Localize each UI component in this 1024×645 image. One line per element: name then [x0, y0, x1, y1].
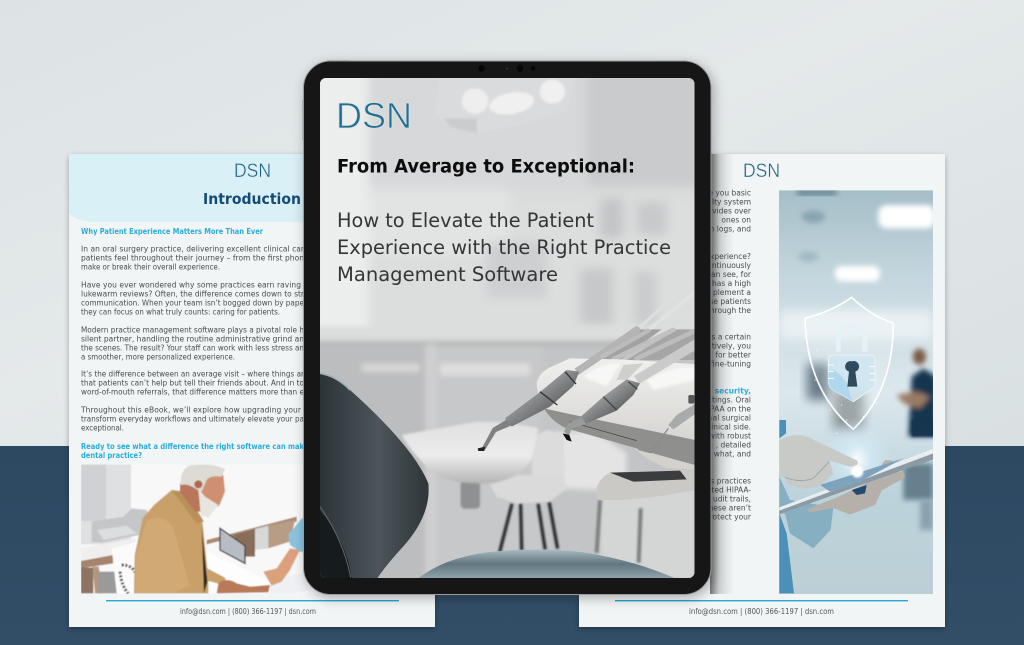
faded upper photo	[313, 68, 700, 335]
handpiece left tip	[478, 419, 513, 451]
hose A over head	[577, 356, 600, 372]
dental instrument unit	[505, 309, 694, 500]
screen: dental office cover	[310, 68, 700, 583]
text block: right page body: ttings. Oral	[709, 396, 751, 405]
logo: cover DSN: DSN	[336, 95, 412, 136]
text block: right page body	[707, 189, 752, 522]
text block: left page body: Ready to see what a difference the right software can mak	[81, 442, 305, 451]
text block: right page body: ones on	[721, 216, 751, 225]
text block: left page body: dental practice?	[81, 451, 142, 460]
cover subtitle: How to Elevate the Patient	[337, 209, 594, 232]
man shirt	[134, 490, 227, 593]
man hands and paper	[217, 580, 270, 593]
text block: right page body: xperience?	[710, 252, 751, 261]
seat	[418, 549, 675, 578]
text block: right page body: hrough the	[710, 306, 751, 315]
text block: right page body: ovides over	[707, 207, 752, 216]
text block: right page body: has a high	[712, 279, 751, 288]
text block: right page body: n logs, and	[710, 225, 751, 234]
hose gaps	[603, 329, 662, 360]
text block: left page body: communication. When your team isn’t bogged down by pape	[81, 299, 304, 308]
blurred figure behind	[903, 463, 933, 500]
dental chair back	[317, 373, 429, 578]
tablet shadow on right page	[710, 154, 734, 594]
text block: left page body: transform everyday workflows and ultimately elevate your pa	[81, 415, 304, 424]
handpiece B	[563, 379, 640, 442]
text block: right page body: vs a certain	[707, 333, 751, 342]
desk left	[82, 539, 134, 560]
text block: left page body: that patients can’t help but tell their friends about. And in to	[81, 379, 304, 388]
text block: right page body: ted HIPAA-	[711, 486, 751, 495]
text block: right page body: rotect your	[710, 513, 752, 522]
text block: right page body: tively, you	[712, 342, 751, 351]
sleeve	[779, 420, 786, 438]
logo: right page DSN: DSN	[743, 161, 780, 182]
footer rule left	[106, 600, 399, 601]
text block: right page body: s practices	[710, 477, 751, 486]
unit underside	[544, 408, 695, 468]
text block: left page body: exceptional.	[81, 424, 124, 433]
text block: right page body: fine-tuning	[710, 360, 751, 369]
sofa	[92, 508, 147, 542]
panel: right ebook page	[579, 154, 945, 627]
front desk	[112, 543, 135, 594]
text block: right page body: hese aren’t	[709, 504, 751, 513]
back counter	[207, 517, 297, 544]
text block: left page body: lukewarm reviews? Often, the difference comes down to str	[81, 290, 305, 299]
footer text right: info@dsn.com | (800) 366-1197 | dsn.com	[689, 607, 834, 616]
text block: right page body: e you basic	[708, 189, 751, 198]
held tablet	[779, 448, 933, 514]
device: tablet	[302, 60, 711, 594]
text block: left page body: In an oral surgery practice, delivering excellent clinical car	[81, 245, 305, 254]
hose B over head	[637, 342, 700, 380]
text block: left page body: the scenes. The result? Your staff can work with less stress an	[81, 344, 304, 353]
text block: left page body: patients feel throughout their journey – from the first phon	[81, 254, 304, 263]
dental lamp	[446, 78, 566, 132]
text block: right page body: an see, for	[711, 270, 752, 279]
handpiece C	[638, 395, 695, 453]
cover subtitle	[337, 209, 671, 286]
text block: left page body: Have you ever wondered why some practices earn raving	[81, 281, 301, 290]
text block: right page body: inical side.	[711, 423, 751, 432]
photo: security shield and tablet	[779, 190, 937, 595]
shield	[805, 297, 893, 429]
footer text left: info@dsn.com | (800) 366-1197 | dsn.com	[180, 607, 316, 616]
text block: right page body: with robust	[709, 432, 751, 441]
sink basin	[533, 430, 627, 490]
tool holder	[597, 469, 695, 500]
text block: right page body: nal surgical	[708, 414, 751, 423]
text block: right page body: se patients	[709, 297, 751, 306]
text block: right page body: ontinuously	[707, 261, 752, 270]
side buttons	[302, 100, 304, 140]
cover subtitle: Management Software	[337, 263, 558, 286]
text block: right page body: udit trails,	[713, 495, 751, 504]
text block: right page body: , detailed	[716, 441, 751, 450]
panel: left ebook page	[69, 154, 435, 627]
header band	[69, 154, 435, 222]
text block: left page body: Why Patient Experience Matters More Than Ever	[81, 227, 263, 236]
text block: left page body: Modern practice management software plays a pivotal role h	[81, 326, 304, 335]
heading: Introduction: Introduction	[203, 190, 301, 208]
hands, sleeve and held tablet	[779, 417, 935, 593]
text block: right page body: d security,	[707, 387, 751, 396]
background person	[897, 349, 937, 437]
text block: left page body: they can focus on what truly counts: caring for patients.	[81, 308, 280, 317]
footer rule right	[615, 600, 908, 601]
text block: right page body: IPAA on the	[708, 405, 751, 414]
monitor	[220, 528, 245, 563]
cover title: From Average to Exceptional:	[337, 156, 635, 178]
text block: left page body: word-of-mouth referrals, that difference matters more than e	[81, 388, 304, 397]
lower hand	[807, 460, 905, 515]
text block: left page body	[80, 227, 305, 460]
camera dots	[478, 65, 535, 72]
padlock	[828, 342, 876, 402]
cover subtitle: Experience with the Right Practice	[337, 236, 671, 259]
text block: right page body: plement a	[713, 288, 751, 297]
text block: left page body: Throughout this eBook, we’ll explore how upgrading your	[80, 406, 302, 415]
text block: right page body: alty system	[707, 198, 751, 207]
text block: left page body: make or break their overall experience.	[81, 263, 220, 272]
receptionist arm	[263, 548, 300, 586]
photo: patient at front desk	[81, 464, 303, 594]
sink column and legs	[461, 480, 480, 509]
text block: left page body: silent partner, handling the routine administrative grind an	[81, 335, 304, 344]
logo: left page DSN: DSN	[234, 161, 271, 182]
lower photo: cabinets	[310, 327, 700, 583]
tablet body	[304, 61, 711, 594]
text block: left page body: a smoother, more personalized experience.	[81, 353, 235, 362]
sparkles	[814, 349, 891, 441]
hoses	[590, 309, 694, 360]
handpiece A	[505, 370, 579, 427]
man neck, head, hair, beard	[179, 483, 201, 512]
text block: right page body: for better	[715, 351, 752, 360]
text block: left page body: It’s the difference between an average visit – where things ar	[81, 370, 305, 379]
pointing hand	[779, 435, 858, 489]
unit head	[537, 358, 695, 442]
text block: right page body: what, and	[714, 450, 751, 459]
